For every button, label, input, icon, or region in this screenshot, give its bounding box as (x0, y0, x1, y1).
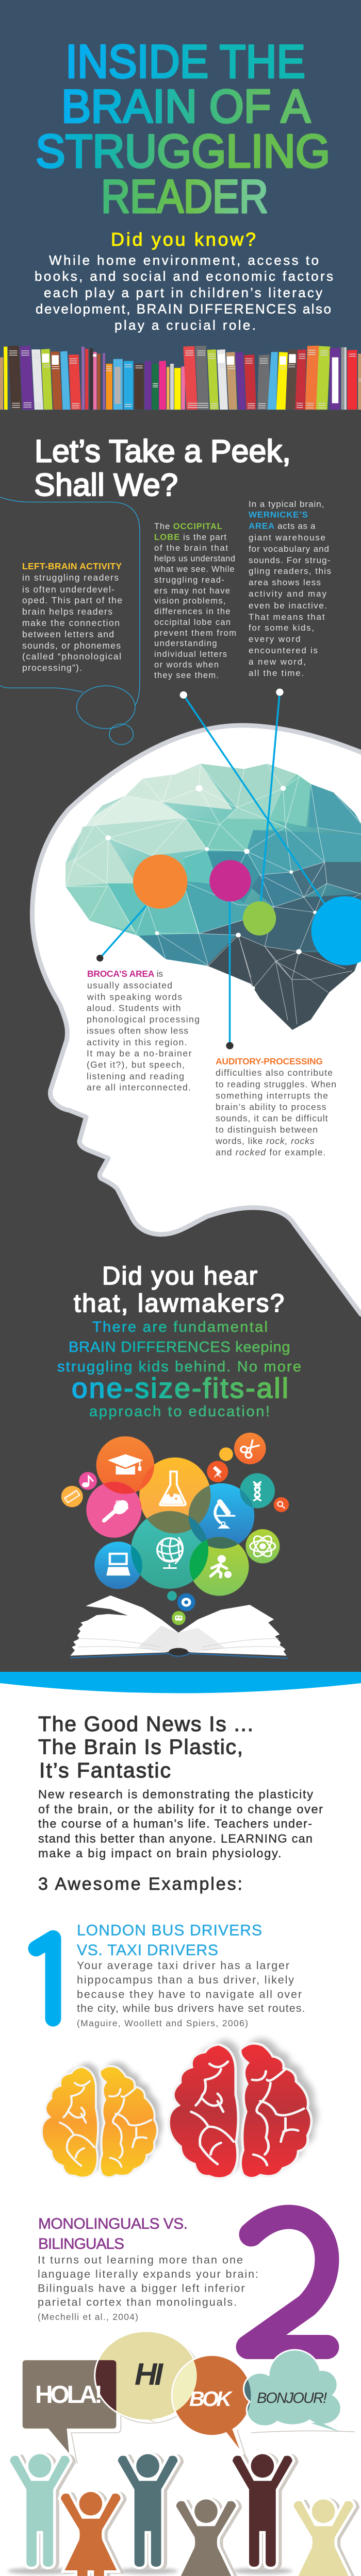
text block: broca's area: listening and reading (87, 1071, 184, 1081)
small yellow brain (43, 2062, 162, 2177)
numeral 1 (36, 1938, 53, 2019)
example 1 text: hippocampus than a bus driver, likely (77, 1974, 294, 1986)
panel: title background (0, 0, 361, 410)
text block: left-brain activity: in struggling readers (22, 572, 119, 583)
illustration: two brains compared (43, 2039, 318, 2177)
example 1 text: (Maguire, Woollett and Spiers, 2006) (77, 2018, 248, 2028)
text block: left-brain activity: make the connection (22, 618, 120, 628)
text block: wernicke's area: AREA acts as a (249, 521, 316, 531)
ground shadows (8, 2568, 356, 2576)
text block: plasticity: New research is demonstrating the plasticity (38, 1788, 313, 1801)
text block: wernicke's area: giant warehouse (249, 533, 325, 543)
text block: occipital lobe: helps us understand (154, 554, 235, 564)
example 1 text: Your average taxi driver has a larger (77, 1959, 289, 1972)
text block: wernicke's area: In a typical brain, (249, 499, 324, 509)
text block: occipital lobe: ers may not have (154, 586, 230, 596)
text block: broca's area: are all interconnected. (87, 1082, 191, 1092)
text block: plasticity: the course of a human’s life. Teachers under- (38, 1817, 312, 1830)
heading: let's take a peek (34, 434, 291, 502)
icon: atom (250, 1533, 275, 1559)
speech bubble: bonjour (244, 2350, 341, 2432)
figure: man slate (118, 2454, 181, 2568)
icon: ruler (64, 1490, 79, 1503)
panel: head silhouette (32, 725, 361, 1314)
text block: intro (35, 252, 333, 333)
text block: left-brain activity: oped. This part of the (22, 595, 122, 605)
speech bubble: bok (171, 2355, 249, 2449)
icon: school bus (175, 1616, 183, 1621)
text block: intro: While home environment, access to (49, 252, 319, 268)
text block: wernicke's area (249, 499, 331, 678)
text block: plasticity: stand this better than anyone. LEARNING can (38, 1832, 313, 1845)
icon: telescope (214, 1467, 221, 1477)
text block: auditory processing: something interrupts the (216, 1090, 328, 1100)
example 2 text: parietal cortex than monolinguals. (38, 2296, 237, 2308)
example 2 text: Bilinguals have a bigger left inferior (38, 2282, 244, 2295)
heading: let's take a peek: Let’s Take a Peek, (35, 434, 291, 469)
text block: left-brain activity: is often underdevel- (22, 584, 114, 595)
icon: gear (183, 1599, 190, 1605)
speech bubble: hola (23, 2360, 116, 2453)
example 2 text: MONOLINGUALS VS. (38, 2215, 188, 2232)
text block: occipital lobe: prevent them from (154, 629, 236, 638)
heading: the good news: The Brain Is Plastic, (38, 1735, 243, 1759)
speech bubble words: HOLA! (35, 2381, 103, 2409)
example 2 text (38, 2215, 258, 2322)
callout: one-size-fits-all message (57, 1319, 301, 1420)
text block: broca's area: usually associated (87, 980, 172, 990)
callout: one-size-fits-all message: one-size-fits-all (72, 1372, 288, 1404)
text block: auditory processing: words, like rock, rocks (215, 1136, 315, 1146)
text block: intro: each play a part in children’s literacy (44, 285, 322, 300)
text block: wernicke's area: gling readers, this (249, 566, 331, 576)
icon: runner (210, 1555, 232, 1578)
icon: music note (82, 1476, 93, 1487)
panel: brain section background (0, 410, 361, 1672)
text block: intro: play a crucial role. (114, 317, 256, 333)
text block: left-brain activity: sounds, or phonemes (22, 640, 121, 651)
illustration: subject bubbles and open book (61, 1433, 289, 1658)
title (36, 36, 330, 223)
open book (70, 1596, 288, 1658)
icon: magnifier (277, 1502, 285, 1509)
text block: intro: books, and social and economic factors (35, 268, 333, 284)
text block: wernicke's area: area shows less (249, 578, 321, 587)
text block: left-brain activity (22, 561, 122, 673)
example 1 text: LONDON BUS DRIVERS (77, 1922, 262, 1939)
text block: wernicke's area: WERNICKE’S (249, 510, 308, 519)
text block: broca's area: with speaking words (87, 992, 182, 1002)
text block: intro: development, BRAIN DIFFERENCES also (36, 301, 331, 316)
icon: flask (160, 1471, 186, 1505)
text block: plasticity (38, 1788, 323, 1860)
speech bubble words (35, 2357, 327, 2411)
figure: man teal (10, 2454, 73, 2568)
text block: broca's area: issues often show less (87, 1025, 188, 1036)
heading: the good news (38, 1712, 253, 1782)
text block: wernicke's area: all the time. (249, 668, 304, 678)
text block: occipital lobe (154, 522, 236, 680)
text block: left-brain activity: between letters and (22, 629, 114, 639)
region circle: magenta (209, 860, 251, 902)
text block: auditory processing: brain’s ability to process (216, 1101, 326, 1112)
brain mesh lines (65, 764, 361, 1024)
text block: broca's area (87, 969, 200, 1092)
example 1 text: VS. TAXI DRIVERS (77, 1942, 218, 1959)
connector lines (100, 692, 324, 1046)
text block: wernicke's area: encountered is (249, 646, 318, 655)
heading: did you hear that, lawmakers: Did you hear (102, 1262, 257, 1290)
text block: occipital lobe: what we see. While (154, 565, 234, 574)
text block: wernicke's area: even be inactive. (249, 601, 327, 611)
title: INSIDE THE (65, 36, 305, 88)
bubble outlines (71, 2333, 354, 2466)
text block: plasticity: of the brain, or the ability for it to change over (38, 1802, 323, 1816)
callout: thought bubble outline (0, 497, 140, 744)
example 2 text: (Mechelli et al., 2004) (38, 2312, 138, 2322)
text block: auditory processing: and rocked for example. (216, 1147, 326, 1157)
heading: 3 awesome examples: 3 Awesome Examples: (38, 1874, 242, 1894)
text block: occipital lobe: LOBE is the part (154, 533, 226, 542)
heading: did you hear that, lawmakers (74, 1262, 284, 1317)
heading: did you know: Did you know? (111, 229, 256, 250)
icon: graduation cap (108, 1454, 143, 1475)
text block: broca's area: It may be a no-brainer (87, 1048, 192, 1058)
text block: broca's area: activity in this region. (87, 1037, 187, 1047)
text block: auditory processing: sounds, it can be difficult (216, 1113, 328, 1123)
text block: wernicke's area: every word (249, 634, 300, 644)
icon: dna (253, 1482, 261, 1501)
text block: occipital lobe: understanding (154, 639, 217, 648)
text block: wernicke's area: for vocabulary and (249, 544, 329, 554)
text block: broca's area: BROCA’S AREA is (87, 969, 163, 979)
illustration: speech bubbles and people (8, 2332, 356, 2576)
example 1 text: because they have to navigate all over (77, 1988, 302, 2001)
region circle: orange (133, 855, 187, 909)
icon: bell (104, 1498, 131, 1521)
text block: occipital lobe: The OCCIPITAL (154, 522, 222, 531)
blue band: top of good news (0, 1672, 361, 1693)
example 1 text (77, 1922, 305, 2028)
example 2 text: BILINGUALS (38, 2235, 124, 2252)
figure: woman orange (61, 2492, 124, 2576)
example 2 text: It turns out learning more than one (38, 2253, 243, 2266)
speech bubble words: BONJOUR! (257, 2390, 327, 2406)
callout: one-size-fits-all message: struggling kids behind. No more (57, 1359, 301, 1375)
figure: man dark brown (233, 2454, 296, 2568)
heading: did you hear that, lawmakers: that, lawmakers? (74, 1290, 284, 1317)
region circle: blue (311, 896, 361, 965)
callout: one-size-fits-all message: BRAIN DIFFERENCES keeping (69, 1339, 290, 1355)
subject bubbles (61, 1433, 289, 1625)
text block: wernicke's area: sounds. For strug- (249, 555, 330, 565)
speech bubble words: BOK (189, 2387, 233, 2411)
text block: occipital lobe: vision problems, (154, 597, 226, 606)
speech bubble: hi (94, 2332, 194, 2422)
large red brain (170, 2039, 318, 2177)
heading: the good news: It’s Fantastic (39, 1758, 171, 1782)
text block: wernicke's area: That means that (249, 612, 325, 622)
title: STRUGGLING (36, 126, 330, 177)
numeral 2 (248, 2217, 327, 2347)
text block: occipital lobe: differences in the (154, 607, 230, 616)
text block: occipital lobe: they see them. (154, 671, 219, 680)
brain illustration (65, 688, 361, 1049)
icon: scissors (241, 1439, 260, 1458)
text block: auditory processing: to reading struggles. When (216, 1079, 336, 1089)
text block: left-brain activity: brain helps readers (22, 606, 112, 617)
text block: left-brain activity: (called “phonological (22, 651, 121, 662)
icon: globe (157, 1537, 183, 1568)
heading: the good news: The Good News Is ... (38, 1712, 253, 1736)
text block: auditory processing: to distinguish between (216, 1124, 318, 1134)
connector end dots (96, 688, 284, 1049)
callout: one-size-fits-all message: approach to education! (89, 1403, 270, 1420)
figure: woman taupe (176, 2499, 239, 2576)
example 1 text: the city, while bus drivers have set routes. (77, 2002, 305, 2014)
example 2 text: language literally expands your brain: (38, 2268, 258, 2280)
text block: occipital lobe: occipital lobe can (154, 618, 231, 627)
text block: auditory processing: difficulties also contribute (216, 1067, 333, 1078)
text block: plasticity: make a big impact on brain physiology. (38, 1846, 282, 1860)
text block: occipital lobe: of the brain that (154, 544, 228, 553)
region circle: green (243, 901, 276, 936)
heading: let's take a peek: Shall We? (34, 467, 178, 502)
icon: microscope (215, 1502, 235, 1529)
bookshelf (0, 346, 361, 410)
figure: woman cream (293, 2499, 356, 2576)
text block: occipital lobe: individual letters (154, 650, 227, 659)
text block: broca's area: (Get it?), but speech, (87, 1059, 185, 1070)
title: READER (101, 171, 268, 223)
text block: left-brain activity: processing”). (22, 663, 82, 673)
text block: broca's area: phonological processing (87, 1014, 200, 1024)
title: BRAIN OF A (61, 80, 310, 133)
text block: wernicke's area: a new word, (249, 657, 306, 667)
text block: left-brain activity: LEFT-BRAIN ACTIVITY (22, 561, 122, 571)
text block: occipital lobe: or words when (154, 660, 219, 670)
icon: laptop (106, 1553, 130, 1575)
text block: auditory processing: AUDITORY-PROCESSING (216, 1056, 323, 1066)
text block: broca's area: aloud. Students with (87, 1003, 180, 1013)
text block: wernicke's area: activity and may (249, 589, 327, 599)
callout: one-size-fits-all message: There are fundamental (92, 1319, 268, 1335)
brain base shape (65, 764, 361, 1030)
text block: auditory processing (215, 1056, 336, 1157)
text block: wernicke's area: for some kids, (249, 623, 314, 633)
panel: good news white background (0, 1672, 361, 2576)
text block: occipital lobe: struggling read- (154, 575, 224, 585)
speech bubble words: HI (135, 2357, 163, 2392)
